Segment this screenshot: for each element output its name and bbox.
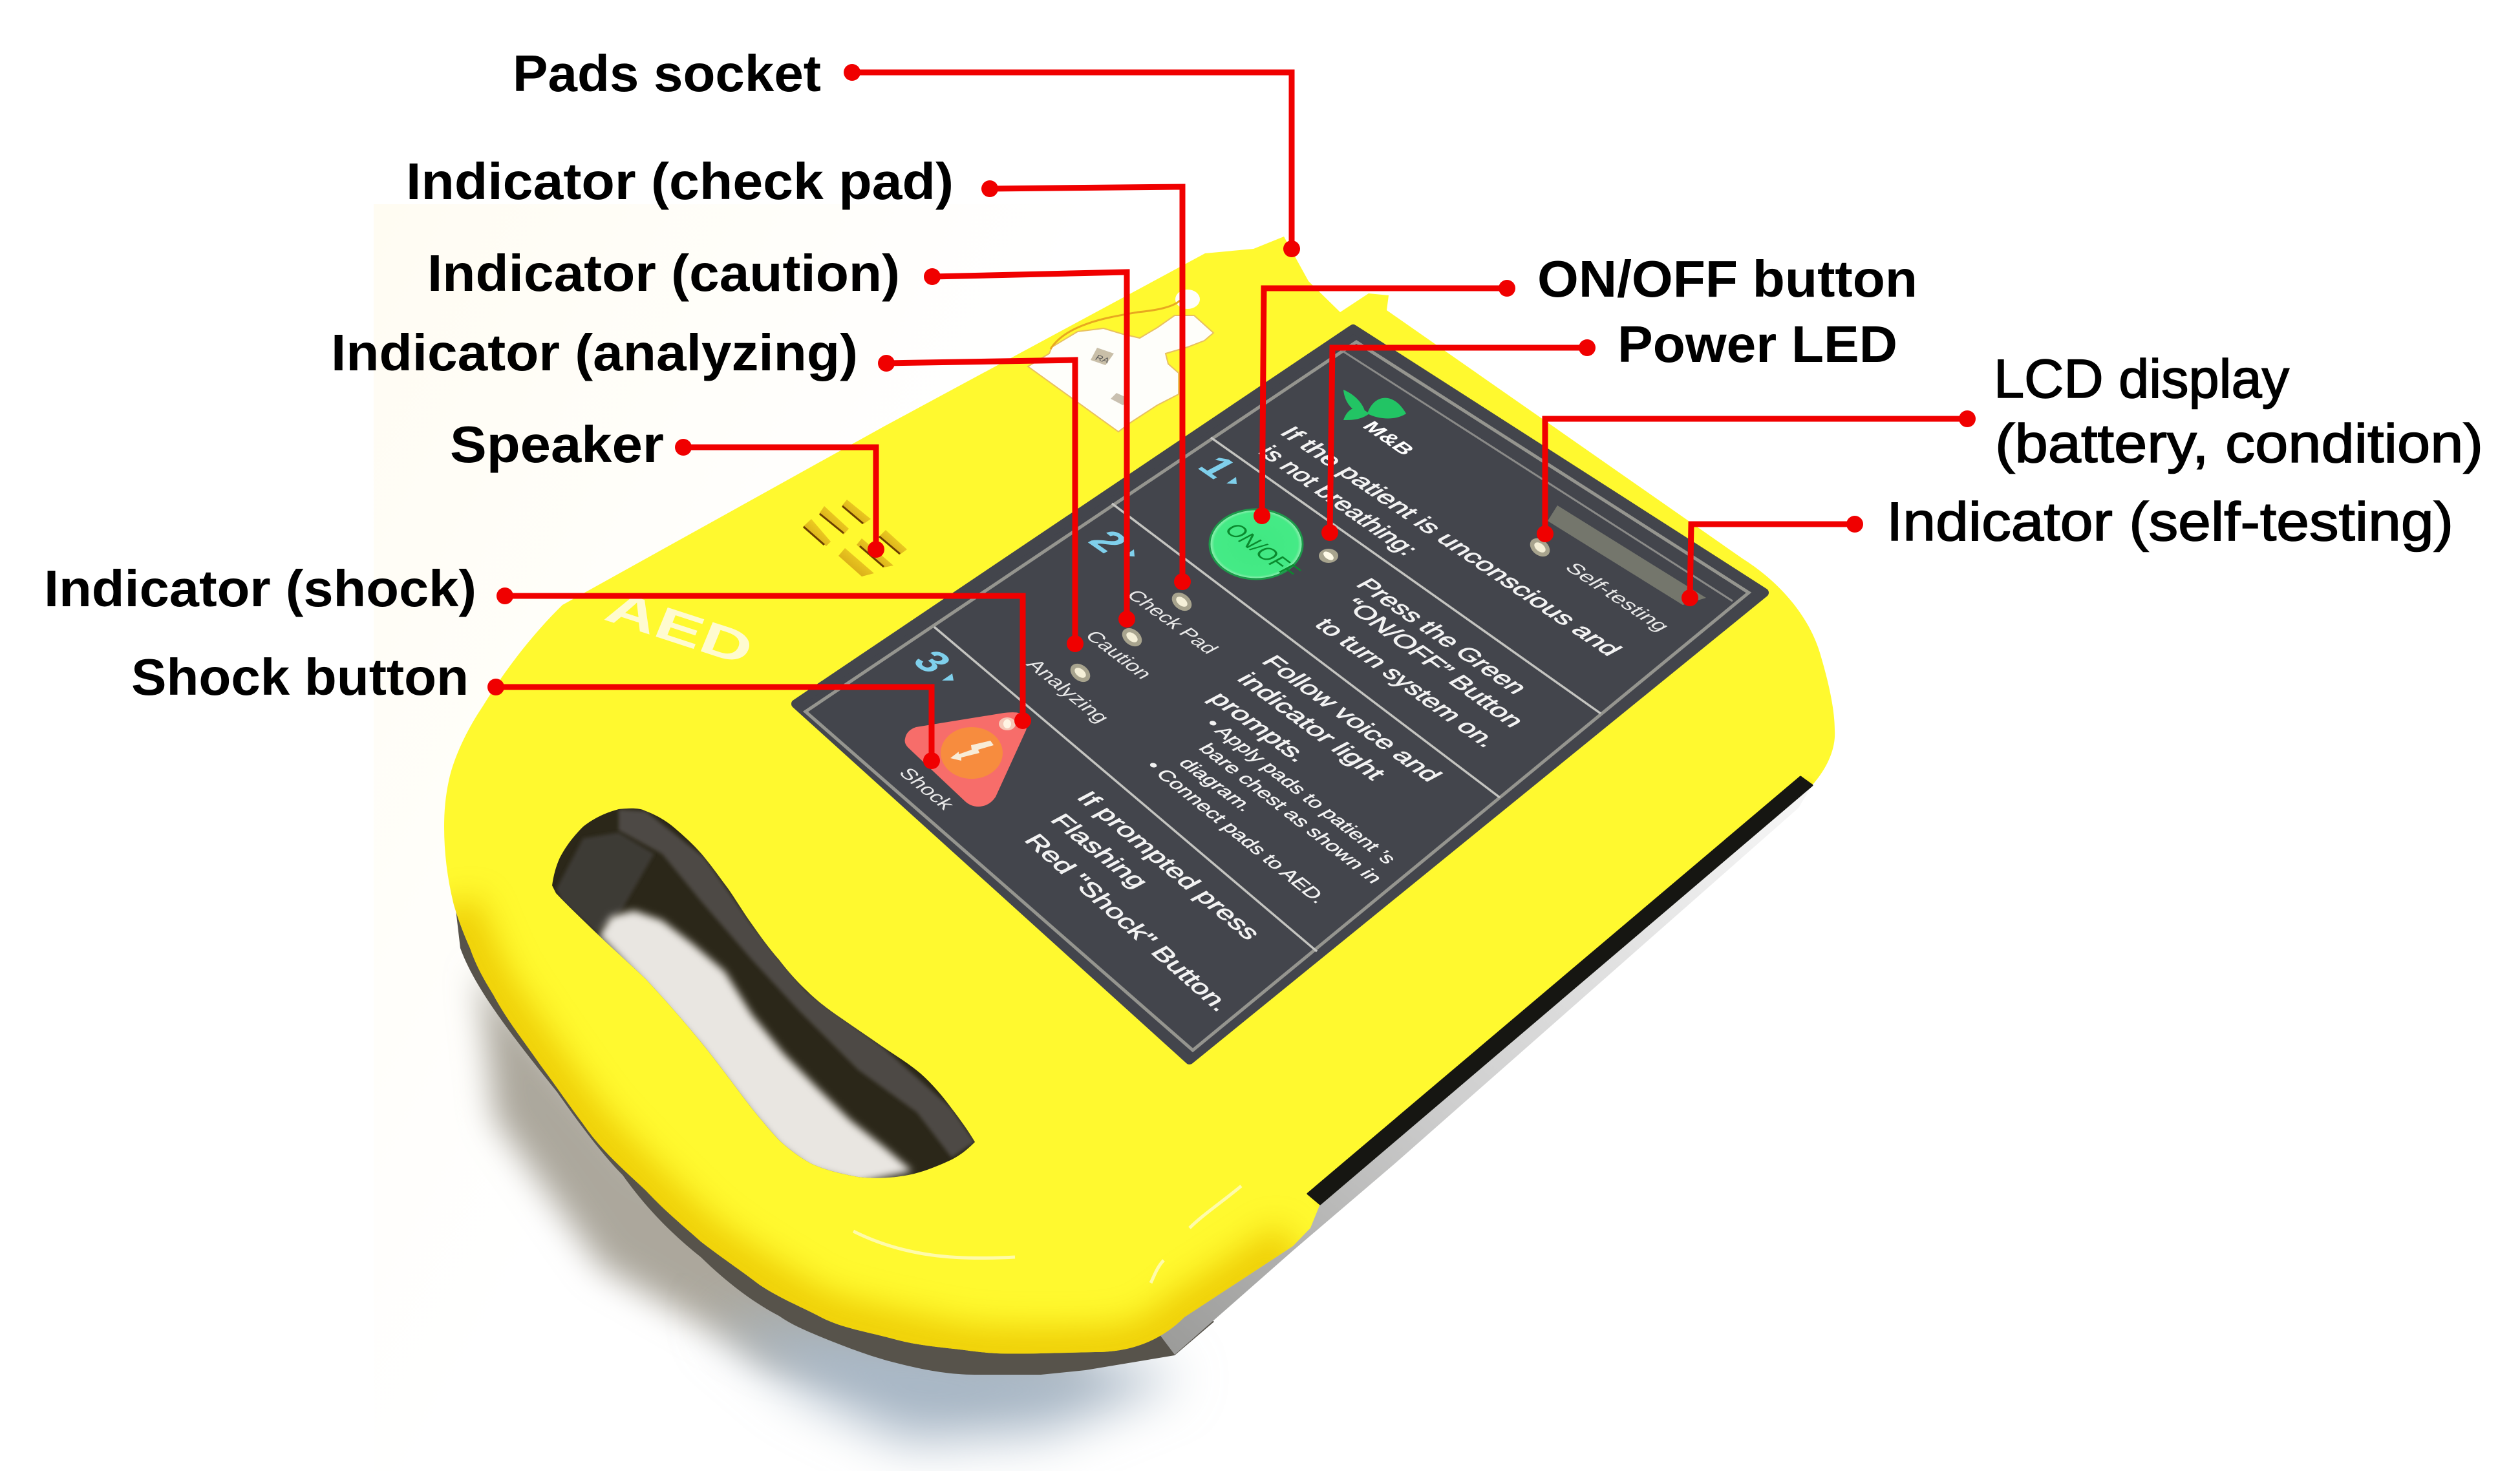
instruction text: step 0: If the patient is unconscious and — [1274, 423, 1628, 659]
handle inner wall — [619, 809, 975, 1158]
LED captions: Caution — [1080, 628, 1157, 682]
LED captions: Shock — [894, 765, 959, 813]
leader: check pad — [981, 180, 1191, 590]
step numbers: 1 — [1188, 450, 1246, 484]
leader: pads socket — [844, 64, 1300, 257]
shock button — [905, 712, 1027, 807]
instruction text: step 3: Red "Shock" Button. — [1019, 830, 1237, 1015]
LED captions: Check Pad — [1122, 587, 1223, 657]
label: Indicator (analyzing): Indicator (analyzing) — [331, 324, 858, 381]
pad diagram sticker — [1028, 290, 1213, 432]
instruction text: step 2 — [1141, 651, 1448, 906]
leader: on/off button — [1254, 280, 1515, 524]
step numbers: 2 — [1079, 524, 1137, 558]
leader: self-testing — [1682, 516, 1863, 606]
logo wordmark: M&B — [1358, 419, 1419, 458]
label: Indicator (self-testing): Indicator (self-testing) — [1886, 491, 2453, 552]
instruction text: step 0: is not breathing: — [1253, 442, 1425, 559]
instruction text: step 2: • Connect pads to AED. — [1141, 758, 1332, 906]
indicator LEDs — [999, 534, 1554, 730]
label: Speaker: Speaker — [450, 416, 664, 473]
leader: shock button — [487, 679, 940, 769]
device side panel — [1157, 785, 1812, 1355]
LED captions: Self-testing — [1560, 560, 1674, 634]
instruction text: step 2: diagram. — [1174, 756, 1259, 814]
label: LCD display — [1994, 348, 2483, 474]
step numbers: 3 — [903, 644, 961, 679]
instruction text: step 3: Flashing — [1045, 810, 1155, 892]
label: Shock button: Shock button — [131, 648, 469, 706]
instruction text: step 2: Follow voice and — [1256, 651, 1448, 785]
instruction text: step 2: • Apply pads to patient ’s — [1201, 716, 1401, 867]
RA pad — [1091, 348, 1114, 365]
lower pad — [1111, 393, 1129, 405]
label: LCD display: (battery, condition) — [1995, 413, 2483, 474]
label: Indicator (check pad): Indicator (check pad) — [406, 153, 954, 210]
RA pad: RA — [1093, 353, 1112, 365]
leader: power LED — [1321, 339, 1596, 541]
instruction text: step 1: “ON/OFF” Button — [1338, 595, 1531, 731]
ON/OFF button: ON/OFF — [1219, 520, 1307, 581]
panel border — [806, 342, 1749, 1050]
black side strip — [1308, 777, 1812, 1204]
instruction text: step 3: If prompted press — [1071, 787, 1267, 944]
label: Pads socket: Pads socket — [513, 45, 821, 102]
instruction text: step 1 — [1309, 575, 1534, 751]
device bottom shell — [446, 827, 1214, 1375]
leader: LCD display — [1537, 410, 1976, 542]
instruction text: step 2: bare chest as shown in — [1194, 741, 1387, 886]
handle opening — [552, 808, 975, 1178]
leader: speaker — [675, 439, 884, 558]
LED captions — [894, 560, 1674, 813]
ON/OFF button — [1210, 509, 1307, 581]
instruction text: step 3 — [1019, 787, 1267, 1015]
label: LCD display: LCD display — [1994, 348, 2289, 409]
LED captions: Analyzing — [1021, 657, 1114, 726]
step numbers — [903, 450, 1246, 681]
instruction text: step 2: prompts. — [1203, 688, 1316, 766]
upper double line — [1341, 350, 1733, 601]
leader: caution — [924, 268, 1135, 628]
instruction text: step 1: Press the Green — [1351, 575, 1534, 697]
label: Indicator (caution): Indicator (caution) — [427, 244, 900, 302]
fold highlights — [853, 1186, 1241, 1283]
step dividers — [934, 438, 1601, 951]
label: Power LED: Power LED — [1618, 315, 1897, 373]
label: ON/OFF button: ON/OFF button — [1537, 250, 1917, 308]
label: Indicator (shock): Indicator (shock) — [44, 560, 476, 617]
LCD display — [1548, 505, 1706, 605]
instruction text: step 2: indicator light — [1232, 669, 1393, 783]
control panel — [796, 329, 1764, 1060]
logo — [1343, 390, 1419, 458]
instruction text: step 1: to turn system on. — [1309, 615, 1505, 751]
photo background — [374, 204, 1343, 1471]
AED lettering: AED — [599, 582, 760, 675]
view through the handle — [599, 911, 912, 1183]
lightning symbol — [950, 741, 994, 761]
speaker grille — [803, 500, 907, 577]
leader: analyzing — [878, 355, 1084, 652]
device yellow body — [444, 237, 1835, 1354]
pad hand and wire — [1175, 290, 1200, 309]
device shadow — [478, 969, 1183, 1441]
leader: shock indicator — [497, 587, 1031, 729]
